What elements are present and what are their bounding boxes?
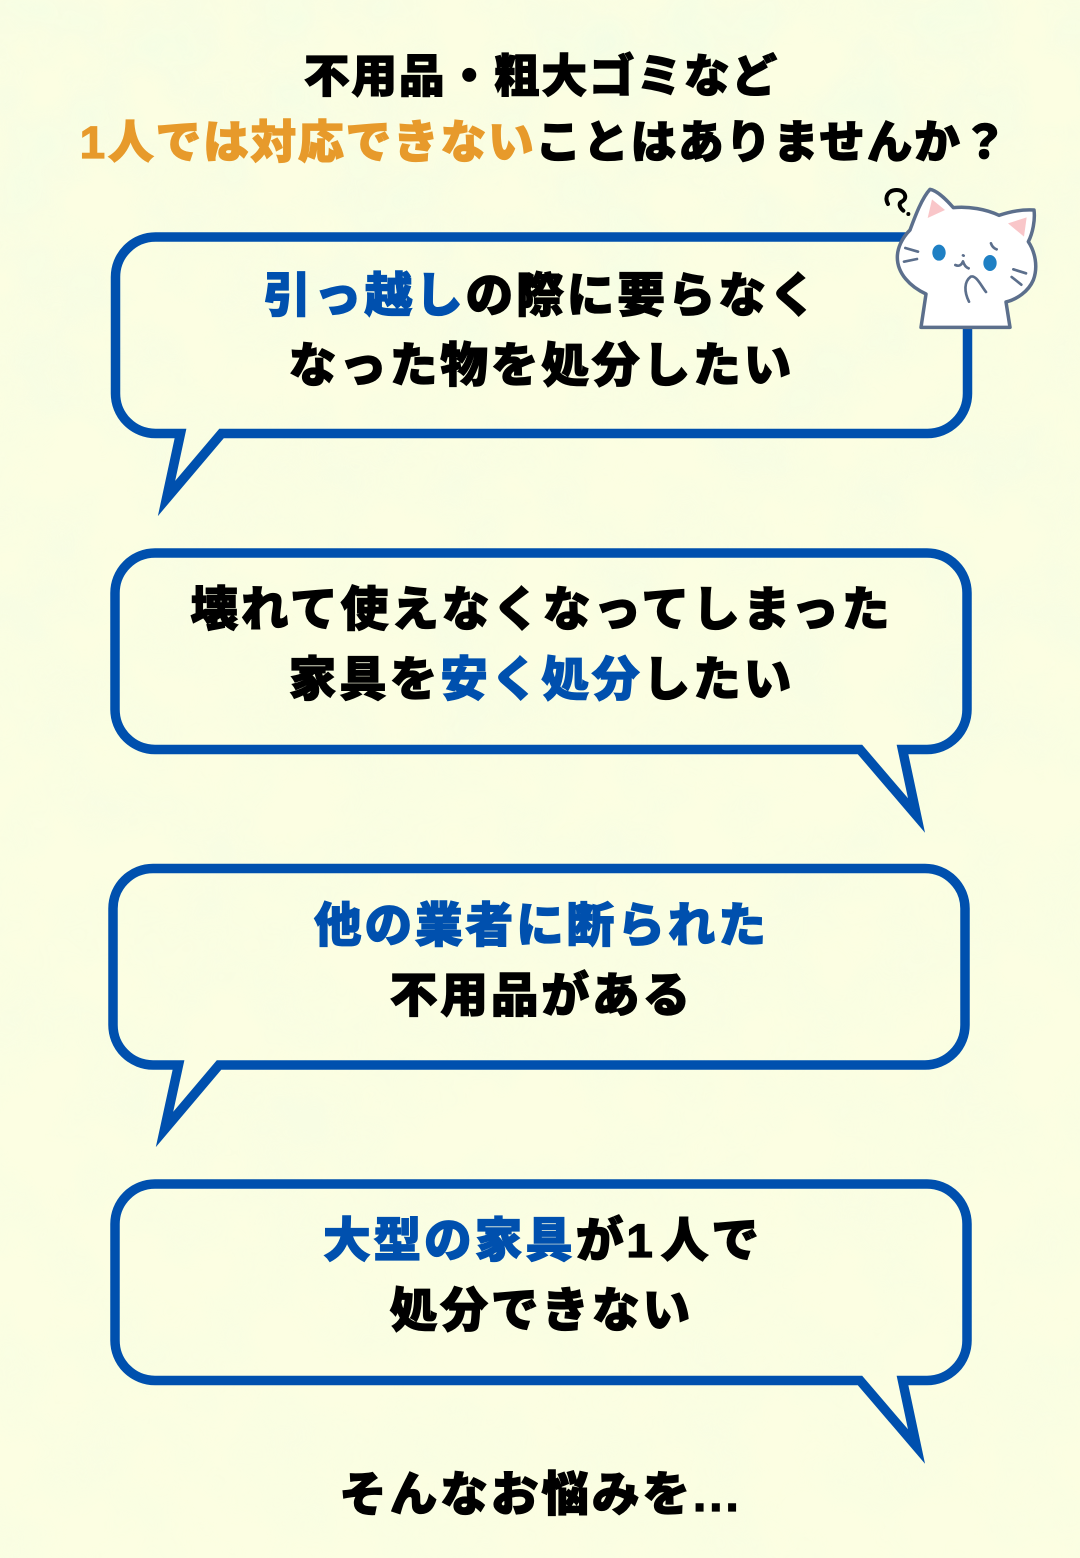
bubble 4 text: 大型の家具が1人で: [323, 1215, 762, 1268]
speech bubble 2 outline: [115, 553, 967, 816]
heading: 1人では対応できないことはありませんか？: [80, 117, 1009, 168]
bubble 2 text: 壊れて使えなくなってしまった: [190, 584, 892, 637]
heading: [80, 51, 1009, 168]
bubble 1 text: なった物を処分したい: [289, 340, 794, 393]
speech bubble 1 outline: [116, 237, 968, 498]
closing text: そんなお悩みを...: [339, 1469, 742, 1522]
bubble 3 text: 他の業者に断られた: [314, 900, 769, 953]
bubble 3 text: 不用品がある: [390, 970, 693, 1023]
icon: puzzled white cat with question mark: [886, 189, 1036, 327]
speech bubble 3 outline: [113, 868, 965, 1130]
bubble 4 text: [323, 1214, 762, 1338]
bubble 2 text: 家具を安く処分したい: [289, 654, 794, 707]
bubble 1 text: [263, 270, 820, 393]
bubble 2 text: [190, 584, 892, 707]
bubble 3 text: [314, 900, 769, 1023]
bubble 4 text: 処分できない: [390, 1285, 693, 1338]
speech bubble 4 outline: [115, 1184, 967, 1446]
bubble 1 text: 引っ越しの際に要らなく: [263, 270, 820, 323]
heading: 不用品・粗大ゴミなど: [304, 51, 779, 102]
